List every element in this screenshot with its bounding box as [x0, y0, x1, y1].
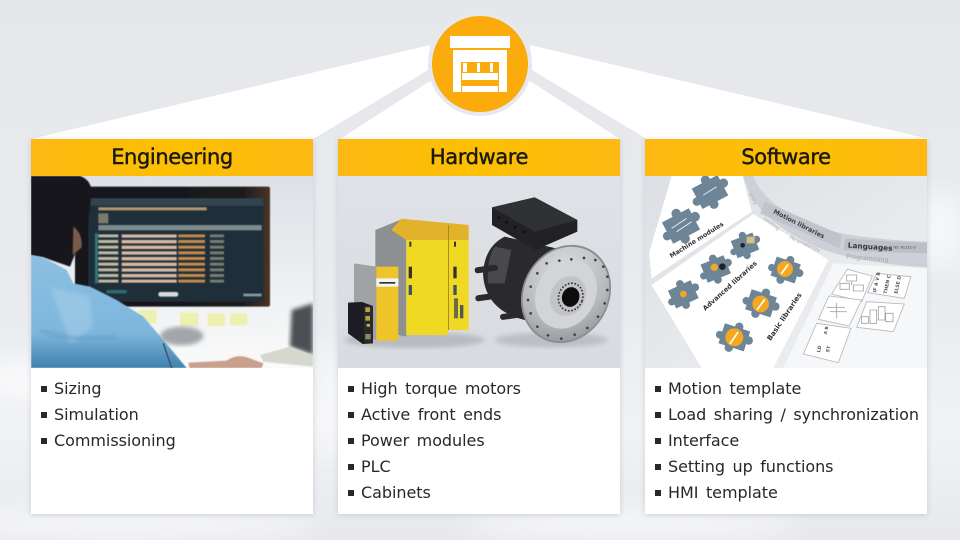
list: software functions: Motion template: [668, 379, 801, 398]
heading: engineering: [31, 139, 313, 176]
diagram: software libraries fan: Basic libraries: [766, 291, 804, 342]
heading: software: Software: [741, 145, 831, 169]
libraries sector: [652, 214, 828, 368]
diagram: software libraries fan: [645, 176, 927, 368]
diagram: software libraries fan: Parameterize: [788, 235, 821, 254]
list: hardware components: Active front ends: [361, 405, 501, 424]
heading: engineering: Engineering: [111, 145, 233, 169]
machine sector: [649, 176, 752, 278]
puzzles: [654, 167, 807, 358]
diagram: software libraries fan: IEC 61131-3: [893, 245, 916, 249]
diagram: software libraries fan: IF A V B: [872, 271, 882, 293]
photo: drives and high torque motor: [338, 176, 620, 368]
heading: hardware: [338, 139, 620, 176]
diagram: software libraries fan: ST: [825, 345, 832, 353]
panel: hardware: [338, 139, 620, 514]
diagram: software libraries fan: Motion libraries: [772, 208, 826, 240]
roof connecting the three columns: [32, 45, 928, 139]
labels on sectors: Machine modules: [669, 221, 725, 260]
list: hardware components: Power modules: [361, 431, 485, 450]
diagram: software libraries fan: ELSE D: [893, 275, 903, 294]
panel: software: [645, 139, 927, 514]
list: engineering tasks: [41, 379, 176, 450]
diagram: software libraries fan: THEN C: [883, 274, 893, 294]
heading: hardware: Hardware: [430, 145, 528, 169]
diagram: software libraries fan: Advanced libraries: [701, 260, 759, 312]
heading: software: [645, 139, 927, 176]
languages sector: [783, 263, 927, 368]
panel: engineering: [31, 139, 313, 514]
language cards: [803, 269, 911, 363]
list: engineering tasks: Sizing: [54, 379, 101, 398]
list: hardware components: [348, 379, 521, 502]
list: software functions: Interface: [668, 431, 739, 450]
list: engineering tasks: Commissioning: [54, 431, 176, 450]
diagram: software libraries fan: Utility: [747, 192, 758, 206]
list: software functions: HMI template: [668, 483, 778, 502]
diagram: software libraries fan: A B: [823, 326, 830, 335]
list: hardware components: Cabinets: [361, 483, 431, 502]
outer arc band: [743, 176, 927, 267]
diagram: software libraries fan: Languages: [848, 241, 893, 253]
diagram: software libraries fan: Limiting: [762, 216, 781, 232]
list: hardware components: High torque motors: [361, 379, 521, 398]
list: hardware components: PLC: [361, 457, 391, 476]
diagram: software libraries fan: Programming: [846, 253, 889, 264]
list: software functions: Load sharing / synchronization: [668, 405, 919, 424]
motor body: [483, 237, 578, 327]
diagram: software libraries fan: LD: [816, 345, 823, 353]
icon: machine press in orange circle: [428, 16, 532, 116]
list: software functions: Setting up functions: [668, 457, 833, 476]
photo: engineer at monitor: [31, 176, 313, 368]
list: software functions: [655, 379, 919, 502]
list: engineering tasks: Simulation: [54, 405, 139, 424]
